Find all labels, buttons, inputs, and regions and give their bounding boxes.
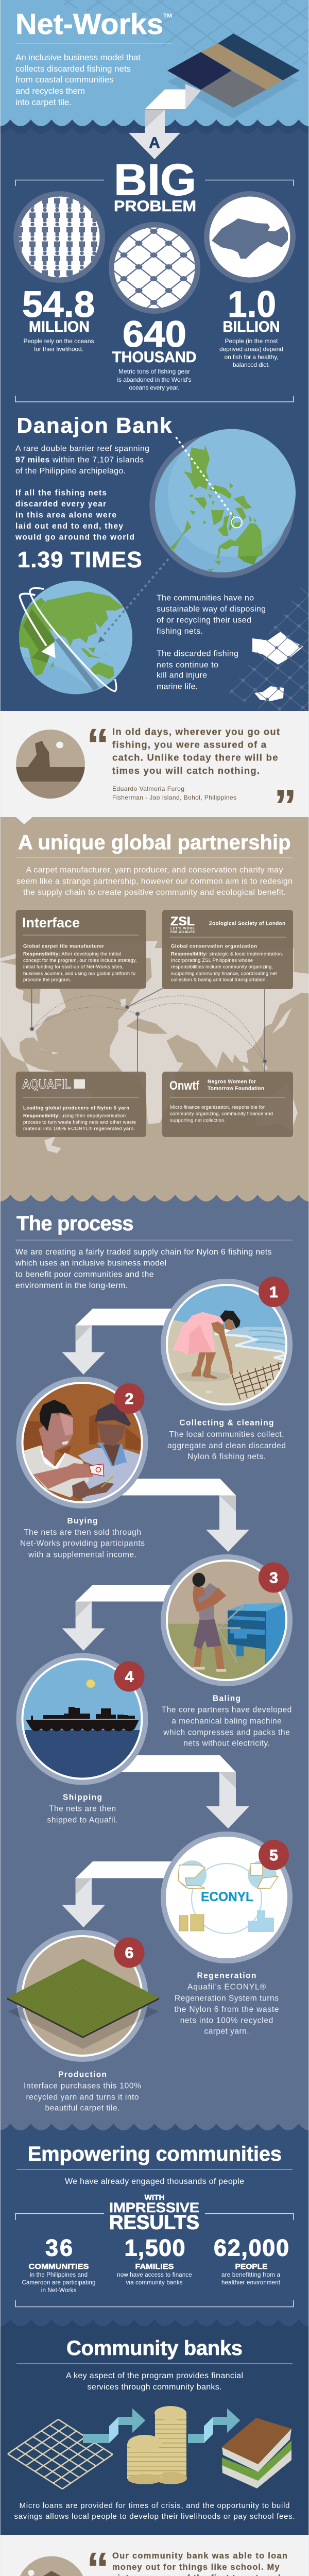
- card: aquafil: AQUAFIL: [22, 1077, 71, 1092]
- icon: person silhouette: [20, 2556, 83, 2576]
- globe: [18, 581, 132, 694]
- caption 5: Regeneration: [197, 1971, 256, 1980]
- diagram: econyl cycle: [178, 1860, 278, 1934]
- arrow 1 to 2: [62, 1309, 175, 1375]
- stat: 1,500 families: FAMILIES: [135, 2262, 174, 2271]
- danajon text: If all the fishing nets: [15, 488, 107, 498]
- caption 3: [162, 1694, 291, 1748]
- arrow 4 to 5: [118, 1755, 249, 1828]
- net-disposal text: fishing nets.: [157, 627, 203, 636]
- caption 2: with a supplemental income.: [28, 1551, 136, 1559]
- card: zsl: responsibilities include community organizing,: [171, 964, 273, 970]
- net-disposal text: [157, 594, 266, 691]
- stat: 62,000 people: 62,000: [214, 2235, 289, 2261]
- card: zsl: Zoological Society of London: [209, 921, 285, 926]
- intro text: collects discarded fishing nets: [15, 64, 131, 74]
- panel: hero: [0, 0, 309, 134]
- stat: 1.0 billion: People (in the most: [225, 337, 278, 345]
- intro: financial services: services through community banks.: [88, 2383, 221, 2392]
- intro: thousands engaged: We have already engaged thousands of people: [65, 2177, 244, 2186]
- card: nwtf: community organizing, community finance and: [170, 1111, 273, 1117]
- arrow: coins to books: [188, 2408, 240, 2443]
- quote text: times you will catch nothing.: [112, 765, 260, 776]
- step 6: production: 6: [125, 1944, 133, 1962]
- card: aquafil: Leading global producers of Nylon 6 yarn: [23, 1106, 129, 1111]
- card: nwtf: Micro finance organization, responsible for: [170, 1105, 265, 1110]
- card: aquafil: Responsibility: using their depolymerisation: [23, 1113, 126, 1119]
- process intro: to benefit poor communities and the: [15, 1270, 154, 1279]
- card: interface: Responsibility: After developing the initial: [23, 951, 121, 957]
- caption 1: [167, 1419, 286, 1461]
- caption 6: recycled yarn and turns it into: [26, 2093, 139, 2102]
- intro text: and recycles them: [15, 86, 85, 96]
- panel: quote community bank: [0, 2535, 309, 2576]
- world map: [0, 941, 309, 1153]
- caption 1: aggregate and clean discarded: [167, 1442, 286, 1450]
- card: nwtf: Negros Women for: [208, 1079, 256, 1085]
- caption 3: The core partners have developed: [162, 1705, 291, 1715]
- micro loans text: [14, 2501, 295, 2521]
- net-disposal text: kill and injure: [157, 671, 207, 680]
- caption 5: carpet yarn.: [204, 2027, 249, 2036]
- intro: financial services: [66, 2371, 243, 2392]
- card: interface: Interface: [22, 915, 80, 930]
- stat: 1,500 families: [117, 2235, 192, 2286]
- heading: a big problem: PROBLEM: [114, 198, 196, 215]
- heading: impressive results: WITH: [144, 2193, 165, 2202]
- net with trapped fish: [229, 575, 309, 710]
- stat: 62,000 people: [214, 2235, 289, 2286]
- caption 1: Nylon 6 fishing nets.: [187, 1452, 266, 1461]
- heading: a big problem: BIG: [114, 156, 196, 205]
- caption 5: the Nylon 6 from the waste: [174, 2005, 279, 2014]
- stat: 1.0 billion: BILLION: [222, 318, 280, 335]
- card: aquafil: process to turn waste fishing nets and other waste: [23, 1120, 136, 1125]
- stat: 1,500 families: now have access to finance: [117, 2272, 192, 2278]
- attribution: Fisherman - Jao Island, Bohol, Philippines: [112, 794, 236, 801]
- stat: 640 thousand: oceans every year.: [129, 384, 179, 392]
- intro: financial services: A key aspect of the program provides financial: [66, 2371, 243, 2380]
- step 2: buying: 2: [125, 1391, 133, 1408]
- icon: coin stacks: [127, 2406, 187, 2484]
- badge 2: [114, 1383, 144, 1414]
- process intro: [15, 1248, 272, 1290]
- net-disposal text: nets continue to: [157, 660, 218, 670]
- card: nwtf: Onwtf: [169, 1079, 200, 1093]
- intro text: into carpet tile.: [15, 97, 72, 107]
- danajon text: in this area alone were: [15, 511, 116, 519]
- card: aquafil: [16, 1072, 146, 1137]
- net background pattern: [46, 0, 309, 64]
- step 5: regeneration: [161, 1832, 293, 2036]
- danajon text: discarded every year: [15, 500, 106, 509]
- caption 2: [20, 1517, 145, 1559]
- caption 3: Baling: [213, 1694, 241, 1703]
- danajon text: 97 miles within the 7,107 islands: [15, 455, 144, 465]
- caption 2: The nets are then sold through: [24, 1528, 141, 1537]
- map: philippines: [149, 429, 296, 578]
- caption 4: The nets are then: [49, 1804, 116, 1814]
- badge 6: [114, 1937, 144, 1968]
- danajon text: [15, 444, 149, 572]
- icon: net: [8, 2419, 113, 2489]
- illustration: man at baling machine: [162, 1561, 291, 1684]
- step 3: baling: [161, 1554, 293, 1748]
- panel: partnership: [0, 817, 309, 1204]
- title: Net-Works: [15, 8, 163, 41]
- card: zsl: ZSL: [170, 914, 195, 928]
- caption 2: Net-Works providing participants: [20, 1539, 145, 1548]
- illustration: container ship: [24, 1660, 141, 1777]
- ribbon arrow: [129, 84, 201, 159]
- caption 5: [174, 1971, 279, 2036]
- icon: aquafil mark: [74, 1079, 85, 1089]
- danajon text: laid out end to end, they: [15, 522, 123, 531]
- stat: 54.8 million: [13, 191, 105, 352]
- net-disposal text: sustainable way of disposing: [157, 605, 266, 614]
- card: zsl: LET'S WORK: [170, 927, 195, 930]
- card: zsl: Incorporating ZSL Philippines whose: [171, 958, 253, 963]
- card: interface: Global carpet tile manufacturer: [23, 944, 104, 949]
- caption 6: [24, 2070, 141, 2112]
- intro text: An inclusive business model that: [15, 53, 141, 62]
- process intro: environment in the long-term.: [15, 1281, 128, 1290]
- badge 1: [259, 1277, 289, 1307]
- caption 4: shipped to Aquafil.: [47, 1816, 117, 1825]
- panel: community banks: [0, 2319, 309, 2535]
- stat: 62,000 people: are benefitting from a: [221, 2272, 281, 2278]
- illustration: woman collecting net: [168, 1286, 285, 1403]
- quote text: Our community bank was able to loan: [112, 2551, 287, 2561]
- arrow 2 to 3: [118, 1479, 249, 1552]
- stat: 640 thousand: is abandoned in the World's: [117, 376, 192, 383]
- danajon text: 1.39 TIMES: [18, 547, 142, 572]
- icon: fisherman: [15, 730, 85, 802]
- attribution: Eduardo Valmoria Furog: [112, 785, 184, 792]
- diagram: econyl cycle: ECONYL: [201, 1890, 253, 1904]
- card: interface: [16, 910, 146, 989]
- stat: 36 communities: Cameroon are participating: [22, 2280, 96, 2286]
- stat: 36 communities: COMMUNITIES: [29, 2262, 89, 2271]
- arrow 3 to 4: [62, 1585, 175, 1651]
- heading: community banks: Community banks: [66, 2337, 243, 2360]
- card: nwtf: supporting net collection.: [170, 1118, 226, 1123]
- stat: 54.8 million: MILLION: [29, 318, 90, 335]
- step 2: buying: [16, 1377, 148, 1559]
- badge 4: [114, 1661, 144, 1692]
- danajon text: A rare double barrier reef spanning: [15, 444, 149, 453]
- step 6: production: [7, 1930, 159, 2112]
- stat: 62,000 people: healthier environment: [221, 2280, 281, 2286]
- micro loans text: savings allows local people to develop their livelihoods or pay school fees.: [14, 2512, 295, 2521]
- card: zsl: collection & baling and local transportation.: [171, 977, 267, 983]
- step 5: regeneration: 5: [269, 1847, 278, 1864]
- stat: 54.8 million: People rely on the oceans: [24, 337, 94, 345]
- heading: a big problem: A: [149, 134, 160, 151]
- stat: 36 communities: [22, 2235, 96, 2294]
- wave: navy section: [0, 120, 309, 148]
- process intro: We are creating a fairly traded supply chain for Nylon 6 fishing nets: [15, 1248, 272, 1257]
- caption 5: nets into 100% recycled: [180, 2016, 273, 2025]
- heading: impressive results: IMPRESSIVE: [109, 2200, 199, 2215]
- stat: 1,500 families: via community banks: [126, 2280, 183, 2286]
- trademark: TM: [163, 13, 172, 19]
- arrow 5 to 6: [62, 1861, 175, 1927]
- quote text: In old days, wherever you go out: [112, 726, 280, 737]
- card: interface: concept for the program, our roles include strategy,: [23, 958, 137, 963]
- heading: empowering communities: Empowering communities: [28, 2143, 282, 2165]
- step 1: collecting: [160, 1277, 294, 1461]
- stat: 1.0 billion: 1.0: [228, 284, 276, 325]
- badge 3: [259, 1562, 289, 1593]
- caption 4: Shipping: [63, 1793, 102, 1802]
- stat: 36 communities: in Net-Works: [41, 2287, 76, 2294]
- panel: quote fisherman: [0, 711, 309, 817]
- quote text: catch. Unlike today there will be: [112, 752, 278, 762]
- card: nwtf: [162, 1072, 293, 1137]
- step 1: collecting: 1: [269, 1284, 278, 1301]
- partnership intro: [16, 866, 293, 897]
- card: zsl: Global conservation organization: [171, 944, 257, 949]
- micro loans text: Micro loans are provided for times of crisis, and the opportunity to build: [20, 2501, 289, 2510]
- card: aquafil: material into 100% ECONYL® regenerated yarn.: [23, 1126, 135, 1131]
- card: zsl: Responsibility: strategic & local implementation.: [171, 951, 283, 957]
- net-disposal text: of or recycling their used: [157, 616, 251, 624]
- attribution: [112, 785, 236, 801]
- caption 5: Regeneration System turns: [175, 1994, 279, 2003]
- partnership intro: A carpet manufacturer, yarn producer, and conservation charity may: [26, 866, 283, 875]
- caption 3: nets without electricity.: [183, 1739, 270, 1748]
- intro text: [15, 53, 141, 107]
- panel: the process: [0, 1195, 309, 2133]
- stat: 640 thousand: Metric tons of fishing gear: [118, 368, 190, 375]
- stat: 62,000 people: PEOPLE: [235, 2262, 268, 2271]
- quote text: money out for things like school. My: [112, 2563, 280, 2572]
- card: interface: business acumen, and using our global platform to: [23, 971, 135, 977]
- stat: 54.8 million: 54.8: [22, 284, 95, 325]
- caption 2: Buying: [67, 1517, 98, 1526]
- stat: 640 thousand: [109, 222, 200, 392]
- card: interface: initial funding for start-up of Net-Works sites,: [23, 964, 124, 970]
- stat: 54.8 million: for their livelihood.: [34, 345, 83, 352]
- heading: a big problem: [114, 134, 196, 215]
- partnership intro: the supply chain to create positive community and ecological benefit.: [23, 888, 286, 897]
- icon: books: [221, 2418, 291, 2488]
- panel: empowering communities: [0, 2124, 309, 2330]
- card: zsl: FOR WILDLIFE: [170, 931, 195, 934]
- quote text: [112, 726, 280, 776]
- stat: 1.0 billion: [204, 191, 296, 368]
- stat: 36 communities: 36: [45, 2235, 73, 2261]
- caption 6: Interface purchases this 100%: [24, 2081, 141, 2091]
- heading: partnership: A unique global partnership: [18, 832, 290, 854]
- heading: impressive results: [109, 2193, 199, 2234]
- stat: 1.0 billion: balanced diet.: [233, 361, 270, 368]
- caption 6: beautiful carpet tile.: [45, 2104, 119, 2112]
- heading: impressive results: RESULTS: [109, 2211, 199, 2234]
- stat: 640 thousand: THOUSAND: [112, 349, 197, 366]
- stat: 1.0 billion: deprived areas) depend: [219, 345, 283, 352]
- caption 3: a mechanical baling machine: [171, 1717, 282, 1726]
- arrow: net to coins: [83, 2408, 145, 2443]
- stat: 1.0 billion: on fish for a healthy,: [225, 353, 278, 361]
- stat: 1,500 families: 1,500: [125, 2235, 185, 2261]
- danajon text: of the Philippine archipelago.: [15, 467, 126, 476]
- caption 4: [47, 1793, 117, 1825]
- heading: danajon bank: Danajon Bank: [16, 413, 172, 437]
- quote text: [112, 2551, 287, 2576]
- net-disposal text: The discarded fishing: [157, 649, 238, 658]
- partnership intro: seem like a strange partnership, however our common aim is to redesign: [16, 877, 293, 886]
- stat: 36 communities: in the Philippines and: [30, 2272, 88, 2278]
- caption 1: The local communities collect,: [169, 1430, 284, 1439]
- intro text: from coastal communities: [15, 75, 114, 84]
- card: zsl: [162, 910, 293, 989]
- quote mark: “: [87, 719, 109, 770]
- heading: the process: The process: [16, 1212, 134, 1235]
- dotted connector: [104, 559, 168, 635]
- icon: carpet tile: [167, 33, 300, 118]
- net-disposal text: marine life.: [157, 682, 198, 691]
- caption 6: Production: [58, 2070, 107, 2079]
- caption 1: Collecting & cleaning: [179, 1419, 274, 1427]
- process intro: which uses an inclusive business model: [15, 1259, 166, 1267]
- card: nwtf: Tomorrow Foundation: [208, 1086, 264, 1091]
- illustration: two men exchanging money: [22, 1382, 143, 1503]
- card: interface: promote the program.: [23, 977, 71, 983]
- card: zsl: supporting community finance, coordinating net: [171, 971, 277, 977]
- closing quote mark: ”: [274, 780, 297, 831]
- connector lines and routes: [30, 988, 267, 1072]
- illustration: green carpet tile: [7, 1959, 159, 2049]
- step 4: shipping: [16, 1653, 148, 1825]
- step 4: shipping: 4: [125, 1668, 134, 1686]
- caption 3: which compresses and packs the: [163, 1728, 290, 1737]
- caption 5: Aquafil's ECONYL®: [187, 1982, 266, 1992]
- step 3: baling: 3: [269, 1569, 278, 1587]
- stat: 640 thousand: 640: [123, 314, 186, 355]
- panel: big problem: [0, 84, 309, 711]
- net-disposal text: The communities have no: [157, 594, 254, 603]
- quote text: fishing, you were assured of a: [112, 739, 267, 750]
- icon: fish: [212, 218, 288, 259]
- danajon text: would go around the world: [15, 533, 134, 542]
- badge 5: [259, 1840, 289, 1870]
